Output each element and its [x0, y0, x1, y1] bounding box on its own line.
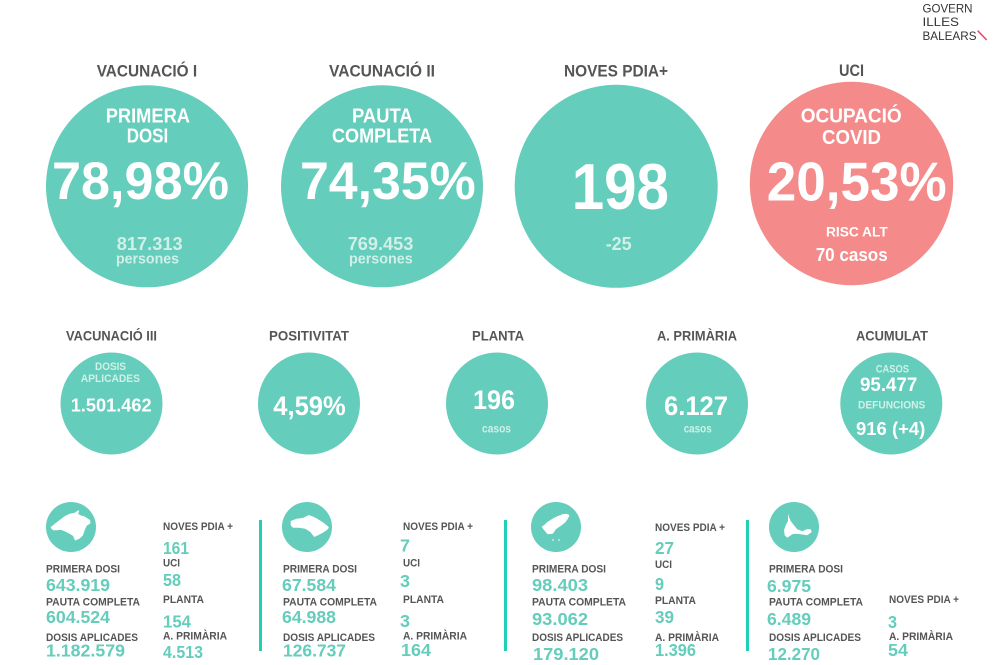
panel: Vacunació III: 1.501.462	[71, 395, 152, 416]
panel: Formentera: 6.975	[767, 576, 811, 596]
panel: Menorca: UCI	[403, 558, 420, 570]
icon: Formentera	[769, 502, 819, 552]
panel: Mallorca: 161	[163, 538, 189, 558]
panel: Eivissa: 1.396	[655, 640, 696, 660]
panel: Eivissa: PAUTA COMPLETA	[532, 597, 626, 609]
panel: Eivissa: PLANTA	[655, 595, 696, 607]
panel: Menorca: NOVES PDIA +	[403, 521, 473, 533]
panel: Noves PDIA+: -25	[606, 234, 632, 254]
panel: Formentera: 12.270	[768, 644, 820, 664]
panel: Mallorca: 4.513	[163, 642, 203, 662]
panel: Eivissa: A. PRIMÀRIA	[655, 631, 719, 644]
panel: Vacunació II: 74,35%	[300, 152, 476, 211]
panel: Planta: PLANTA	[472, 328, 524, 344]
panel: Mallorca: A. PRIMÀRIA	[163, 630, 227, 643]
logo: Govern Illes Balears: GOVERN	[922, 2, 972, 16]
panel: Eivissa: 179.120	[533, 644, 599, 664]
panel: A. Primària	[646, 328, 748, 454]
panel: UCI: OCUPACIÓ	[801, 104, 902, 128]
panel: Eivissa	[531, 502, 725, 664]
panel: Menorca: A. PRIMÀRIA	[403, 630, 467, 643]
panel: Mallorca: 154	[163, 612, 191, 632]
panel: UCI: UCI	[839, 61, 864, 80]
panel: Planta: 196	[473, 385, 515, 415]
icon: Eivissa	[531, 502, 581, 552]
panel: Vacunació III: APLICADES	[81, 373, 140, 385]
panel: Formentera: 54	[888, 640, 908, 660]
panel: Vacunació I: PRIMERA	[106, 106, 190, 128]
panel: Vacunació I: 78,98%	[52, 152, 229, 211]
panel: Menorca: 126.737	[283, 641, 346, 661]
panel: Mallorca: 58	[163, 570, 181, 590]
panel: Vacunació III: VACUNACIÓ III	[66, 327, 157, 344]
panel: UCI: RISC ALT	[826, 224, 888, 240]
panel: Acumulat: 95.477	[860, 375, 917, 396]
panel: Vacunació II: VACUNACIÓ II	[329, 62, 435, 81]
panel: Eivissa: UCI	[655, 559, 672, 571]
panel: A. Primària: 6.127	[664, 391, 728, 421]
panel: A. Primària: A. PRIMÀRIA	[657, 328, 737, 344]
panel: Positivitat: 4,59%	[273, 391, 346, 421]
panel: UCI	[750, 61, 953, 285]
panel: Mallorca: PLANTA	[163, 594, 204, 606]
panel: Vacunació III	[60, 327, 162, 454]
panel: Formentera: 3	[888, 612, 897, 632]
panel: Mallorca: UCI	[163, 558, 180, 570]
panel: Vacunació II: PAUTA	[352, 106, 413, 128]
panel: Eivissa: 27	[655, 538, 674, 558]
panel: Menorca: 164	[401, 640, 431, 660]
panel: Vacunació III: DOSIS	[95, 361, 126, 373]
panel: Eivissa: 93.062	[532, 609, 588, 629]
icon: Mallorca	[46, 502, 96, 552]
panel: Eivissa: PRIMERA DOSI	[532, 564, 606, 576]
panel: Mallorca: 643.919	[46, 575, 110, 595]
panel: Vacunació II: 769.453	[348, 233, 413, 254]
panel: Noves PDIA+	[515, 62, 718, 288]
panel: Eivissa: 98.403	[532, 575, 588, 595]
panel: Vacunació I	[46, 62, 248, 287]
panel: Menorca: 3	[400, 571, 410, 591]
logo: Govern Illes Balears	[922, 2, 987, 43]
panel: Mallorca: 1.182.579	[46, 641, 125, 661]
panel: Planta	[446, 328, 548, 454]
panel: Mallorca: NOVES PDIA +	[163, 521, 233, 533]
panel: Menorca: PRIMERA DOSI	[283, 564, 357, 576]
panel: Menorca: PAUTA COMPLETA	[283, 597, 377, 609]
panel: Formentera: NOVES PDIA +	[889, 594, 959, 606]
panel: Eivissa: 9	[655, 574, 664, 594]
panel: A. Primària: casos	[684, 423, 712, 435]
panel: Formentera: PRIMERA DOSI	[769, 564, 843, 576]
panel: Vacunació II: COMPLETA	[332, 125, 432, 147]
panel: Menorca: DOSIS APLICADES	[283, 632, 375, 644]
logo: Govern Illes Balears: ILLES	[922, 15, 959, 29]
panel: UCI: 70 casos	[816, 245, 888, 265]
panel: Positivitat: POSITIVITAT	[269, 328, 349, 344]
panel: Planta: casos	[482, 423, 511, 435]
panel: Mallorca: 604.524	[46, 607, 110, 627]
panel: Menorca: 3	[400, 611, 410, 631]
panel: Menorca: 64.988	[282, 607, 336, 627]
panel: Acumulat: ACUMULAT	[856, 328, 928, 344]
panel: Vacunació I: VACUNACIÓ I	[97, 62, 197, 81]
panel: Vacunació I: persones	[116, 250, 179, 267]
panel: Acumulat	[840, 328, 942, 454]
panel: Formentera: A. PRIMÀRIA	[889, 630, 953, 643]
panel: Eivissa: NOVES PDIA +	[655, 522, 725, 534]
panel: Noves PDIA+: NOVES PDIA+	[564, 62, 668, 81]
panel: Menorca: 7	[400, 536, 410, 556]
panel: Formentera: 6.489	[767, 609, 811, 629]
panel: Vacunació II: persones	[349, 250, 413, 267]
panel: Eivissa: DOSIS APLICADES	[532, 632, 623, 644]
panel: Menorca: 67.584	[282, 575, 336, 595]
panel: Vacunació I: 817.313	[117, 233, 183, 254]
panel: UCI: COVID	[822, 127, 881, 149]
panel: Formentera	[767, 502, 959, 664]
panel: Eivissa: 39	[655, 607, 674, 627]
panel: Positivitat	[258, 328, 360, 454]
panel: Menorca	[282, 502, 473, 661]
panel: Acumulat: DEFUNCIONS	[858, 399, 925, 411]
panel: Mallorca	[46, 502, 233, 662]
panel: Menorca: PLANTA	[403, 594, 444, 606]
panel: Vacunació II	[281, 62, 483, 287]
panel: Acumulat: 916 (+4)	[856, 418, 925, 439]
panel: Formentera: DOSIS APLICADES	[769, 632, 861, 644]
panel: Noves PDIA+: 198	[572, 150, 669, 223]
panel: Formentera: PAUTA COMPLETA	[769, 597, 863, 609]
panel: Vacunació I: DOSI	[127, 125, 168, 147]
panel: Acumulat: CASOS	[876, 363, 909, 375]
panel: Mallorca: PRIMERA DOSI	[46, 564, 120, 576]
panel: Mallorca: PAUTA COMPLETA	[46, 597, 140, 609]
panel: Mallorca: DOSIS APLICADES	[46, 632, 138, 644]
icon: Menorca	[282, 502, 332, 552]
logo: Govern Illes Balears: BALEARS	[922, 29, 976, 43]
panel: UCI: 20,53%	[767, 151, 947, 213]
